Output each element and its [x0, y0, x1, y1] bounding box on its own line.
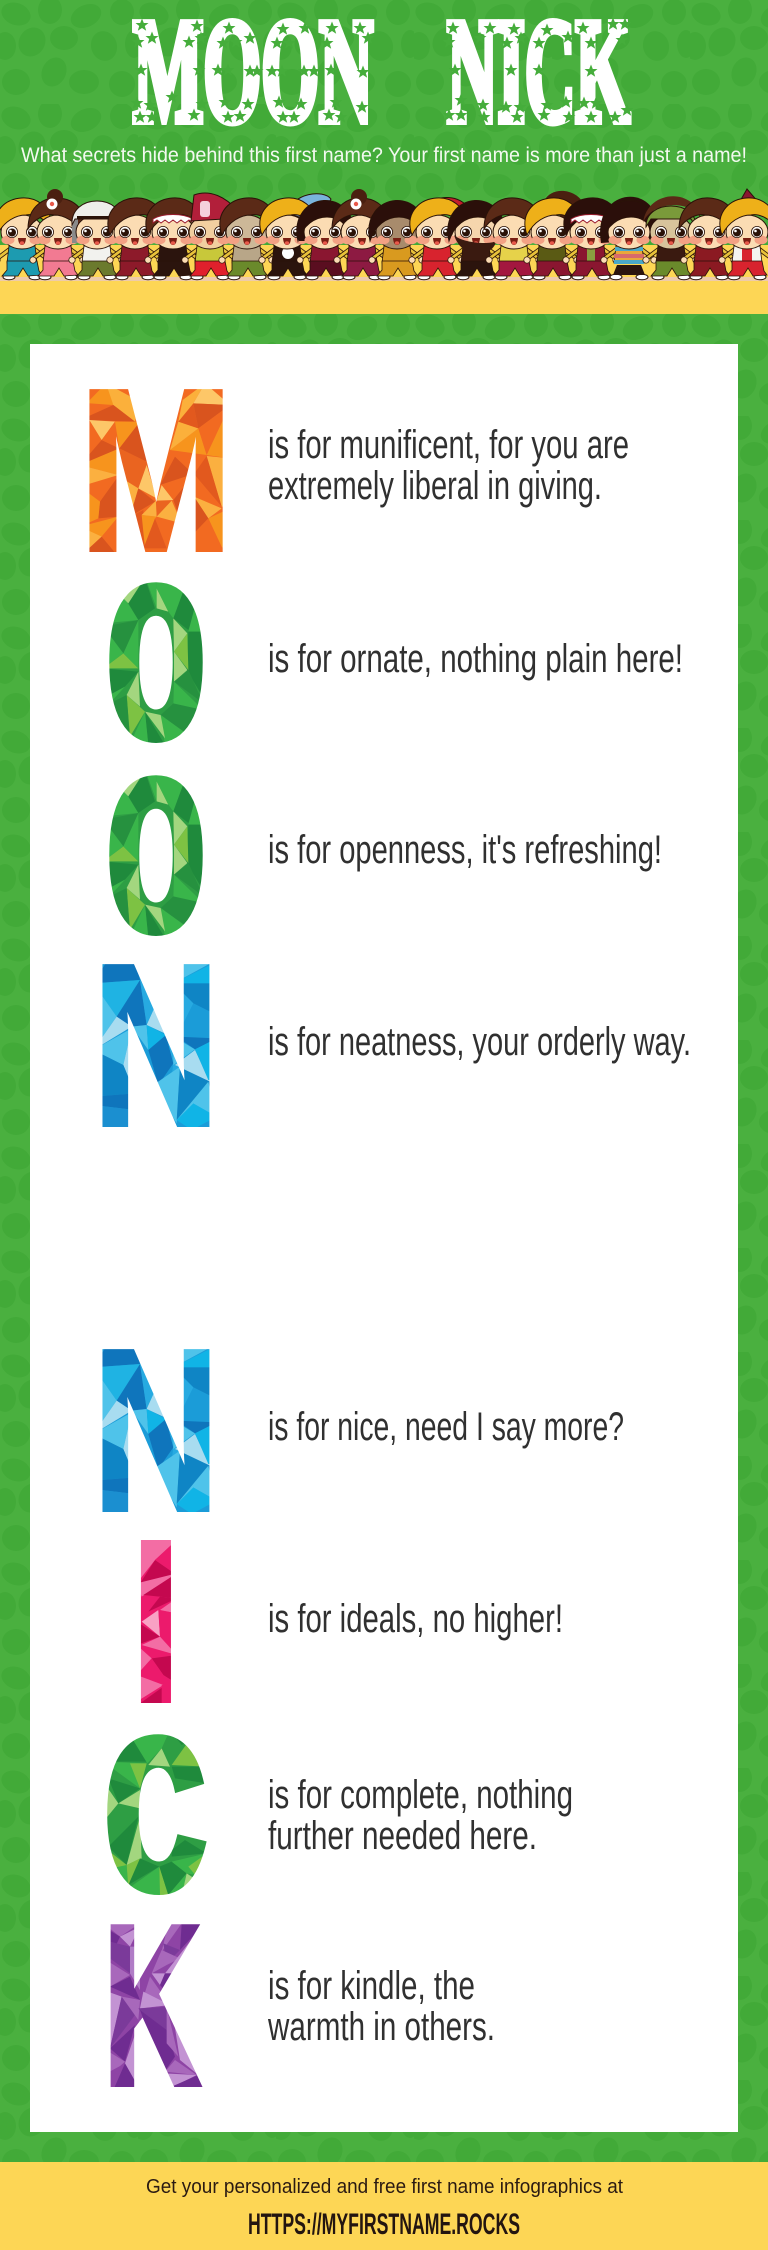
text: C line: further needed here.: [268, 1814, 537, 1858]
letter I, pink low-poly: I: [127, 1489, 185, 1754]
letter O, green low-poly: O: [106, 550, 206, 805]
letter C, green low-poly: C: [104, 1702, 208, 1957]
letter N, blue low-poly: N: [92, 1301, 220, 1559]
footer url: HTTPS://MYFIRSTNAME.ROCKS: [248, 2208, 520, 2241]
footer text: Get your personalized and free first name infographics at: [146, 2176, 623, 2198]
letter K, purple low-poly: K: [104, 1879, 199, 2131]
text: M line: [268, 423, 629, 508]
text: M line: extremely liberal in giving.: [268, 464, 602, 508]
text: C line: is for complete, nothing: [268, 1773, 573, 1817]
footer: yellow call to action: [0, 2162, 768, 2250]
text: K line: [267, 1964, 495, 2049]
panel: white letters panel: [30, 341, 738, 2132]
letter M, orange low-poly: M: [79, 341, 233, 599]
letter O, green low-poly: O: [106, 743, 206, 998]
text: C line: [268, 1773, 573, 1858]
illustration: row of children in costumes holding hands: [0, 189, 768, 280]
banner: yellow strip: [0, 245, 768, 314]
letter N, blue low-poly: N: [92, 916, 220, 1174]
text: N line: is for nice, need I say more?: [268, 1405, 624, 1449]
text: K line: is for kindle, the: [268, 1964, 475, 2008]
text: K line: warmth in others.: [267, 2005, 495, 2049]
text: M line: is for munificent, for you are: [268, 423, 629, 467]
text: I line: is for ideals, no higher!: [268, 1597, 563, 1641]
